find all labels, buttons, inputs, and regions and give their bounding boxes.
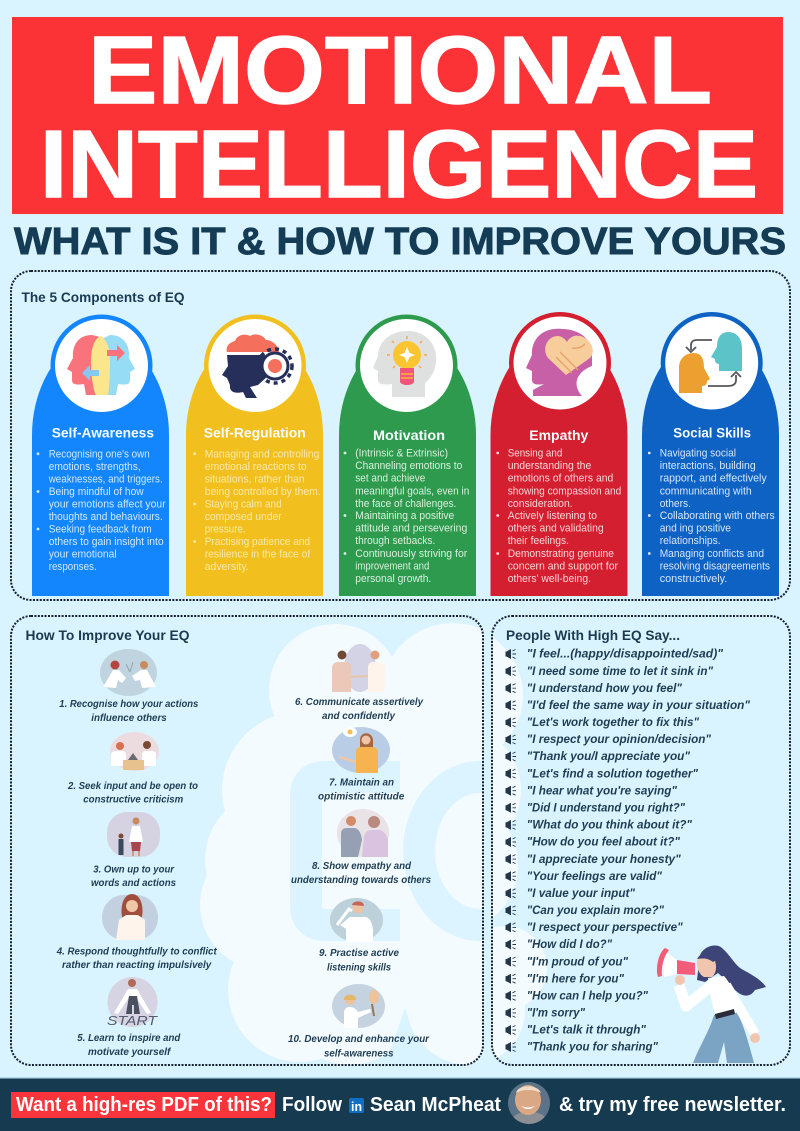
- text: empathy bullets: Actively listening to: [508, 510, 597, 522]
- text: self-regulation bullets: composed under: [205, 511, 282, 523]
- panel: the 5 components of EQ: [11, 271, 790, 600]
- icon: head with brain and gear: [222, 334, 292, 398]
- text: motivation bullets: improvement and: [355, 560, 429, 572]
- text: social skills bullets: rapport, and effectively: [660, 472, 767, 484]
- step 8: [291, 809, 431, 886]
- step 7: 7. Maintain an: [329, 778, 394, 788]
- step 1: [59, 649, 199, 724]
- step 1: 1. Recognise how your actions: [59, 699, 199, 710]
- list: quotes with megaphone bullets: "I'm sorry": [527, 1008, 586, 1020]
- text: self-awareness bullets: emotions, strengths,: [49, 461, 141, 473]
- text: self-awareness bullets: Being mindful of how: [49, 486, 144, 498]
- list: quotes with megaphone bullets: "I feel...(happy/disappointed/sad)": [527, 649, 724, 661]
- list: quotes with megaphone bullets: "I appreciate your honesty": [527, 854, 681, 866]
- list: quotes with megaphone bullets: "Thank you/I appreciate you": [527, 751, 691, 763]
- text: social skills bullets: [648, 448, 775, 585]
- text: motivation bullets: Maintaining a positive: [355, 510, 454, 522]
- list: quotes with megaphone bullets: "I need some time to let it sink in": [527, 666, 714, 678]
- illustration: woman holding a mask: [332, 984, 385, 1028]
- list: quotes with megaphone bullets: "I'm proud of you": [527, 956, 629, 968]
- text: self-awareness bullets: responses.: [49, 561, 97, 573]
- text: empathy bullets: their feelings.: [508, 535, 569, 547]
- text: empathy bullets: showing compassion and: [508, 486, 621, 498]
- text: social skills bullets: Collaborating with others: [660, 510, 775, 522]
- list: quotes with megaphone bullets: "Your feelings are valid": [527, 871, 663, 883]
- text: empathy bullets: others and validating: [508, 522, 604, 534]
- text: self-awareness bullets: Seeking feedback from: [49, 524, 152, 536]
- text: self-regulation bullets: being controlled by them.: [205, 486, 321, 498]
- text: self-awareness bullets: [37, 448, 166, 573]
- heading: people with high EQ say: People With High EQ Say...: [506, 628, 680, 643]
- text: empathy bullets: consideration.: [508, 498, 573, 510]
- footer bar: [0, 1077, 800, 1131]
- text: social skills bullets: Navigating social: [660, 448, 736, 460]
- card: self-regulation: [186, 314, 323, 596]
- background: cloud continuation: [492, 637, 547, 1058]
- card: self-awareness: [32, 314, 169, 596]
- list: quotes with megaphone bullets: "I hear what you're saying": [527, 785, 678, 797]
- list: quotes with megaphone bullets: "Thank you for sharing": [527, 1042, 659, 1054]
- illustration: woman comforting a friend: [337, 809, 389, 857]
- illustration: two people in conversation: [100, 649, 157, 696]
- step 5: 5. Learn to inspire and: [77, 1033, 181, 1044]
- icon: head with light bulb: [373, 331, 436, 397]
- step 10: self-awareness: [324, 1048, 394, 1060]
- list: quotes with megaphone bullets: "I'd feel the same way in your situation": [527, 700, 751, 712]
- text: motivation bullets: Channeling emotions to: [355, 460, 462, 472]
- list: quotes with megaphone bullets: "Let's talk it through": [527, 1025, 647, 1037]
- step 8: understanding towards others: [291, 875, 431, 886]
- heading: self-regulation: Self-Regulation: [204, 424, 306, 440]
- heading: motivation: Motivation: [373, 427, 445, 443]
- heading: empathy: Empathy: [529, 427, 589, 443]
- card: social skills: [642, 312, 779, 596]
- panel: how to improve your EQ: [10, 615, 484, 1066]
- title banner: INTELLIGENCE: [40, 111, 758, 218]
- step 9: [319, 898, 399, 974]
- photo: sean mcpheat portrait: [507, 1081, 551, 1125]
- text: self-awareness bullets: thoughts and behaviours.: [49, 511, 163, 523]
- list: quotes with megaphone bullets: "I'm here for you": [527, 973, 625, 985]
- text: self-awareness bullets: weaknesses, and triggers.: [48, 474, 163, 486]
- text: empathy bullets: concern and support for: [508, 560, 618, 572]
- text: self-regulation bullets: adversity.: [205, 561, 249, 573]
- step 4: [56, 894, 217, 971]
- text: self-awareness bullets: your emotions affect your: [49, 498, 166, 510]
- list: quotes with megaphone bullets: "I value your input": [527, 888, 636, 900]
- step 4: rather than reacting impulsively: [62, 960, 213, 971]
- panel: people with high EQ say: [491, 615, 791, 1066]
- text: self-regulation bullets: situations, rather than: [205, 474, 305, 486]
- icon: linkedin: in: [351, 1100, 362, 1114]
- illustration: woman thinking: [102, 894, 158, 940]
- title banner: EMOTIONAL: [88, 17, 712, 124]
- text: self-regulation bullets: Managing and controlling: [205, 448, 319, 460]
- step 3: 3. Own up to your: [93, 864, 175, 876]
- icon: head with handshake heart: [526, 329, 593, 396]
- text: empathy bullets: understanding the: [508, 460, 591, 472]
- text: social skills bullets: constructively.: [660, 573, 727, 585]
- text: empathy bullets: others' well-being.: [508, 573, 591, 585]
- illustration: two people with a feedback box: [110, 732, 159, 771]
- heading: self-awareness: Self-Awareness: [52, 424, 154, 440]
- step 3: words and actions: [91, 878, 176, 889]
- step 10: [288, 984, 430, 1060]
- step 4: 4. Respond thoughtfully to conflict: [56, 946, 217, 958]
- step 6: and confidently: [322, 711, 396, 722]
- text: motivation bullets: (Intrinsic & Extrinsic): [355, 448, 448, 460]
- icon: linkedin: [349, 1098, 364, 1114]
- text: empathy bullets: Demonstrating genuine: [508, 548, 614, 560]
- text: motivation bullets: personal growth.: [355, 573, 431, 585]
- step 5: motivate yourself: [88, 1047, 172, 1058]
- step 5: [77, 977, 181, 1058]
- text: empathy bullets: [496, 448, 621, 585]
- illustration: woman with megaphone: [657, 946, 766, 1063]
- text: motivation bullets: [344, 448, 469, 585]
- text: motivation bullets: the face of challenges.: [355, 498, 456, 510]
- list: quotes with megaphone bullets: "I respect your perspective": [527, 922, 683, 934]
- text: self-awareness bullets: Recognising one's own: [49, 448, 150, 460]
- icon: two overlapping heads: [67, 335, 135, 395]
- list: quotes with megaphone bullets: "I understand how you feel": [527, 683, 683, 695]
- subtitle: WHAT IS IT & HOW TO IMPROVE YOURS: [14, 221, 786, 263]
- step 2: [67, 732, 198, 806]
- step 9: listening skills: [327, 962, 391, 974]
- step 3: [91, 812, 176, 889]
- list: quotes with megaphone bullets: "I respect your opinion/decision": [527, 734, 712, 746]
- text: social skills bullets: and ing positive: [660, 522, 731, 534]
- step 7: optimistic attitude: [318, 792, 405, 802]
- text: social skills bullets: interactions, building: [660, 460, 756, 472]
- list: quotes with megaphone bullets: "How do you feel about it?": [527, 837, 681, 849]
- step 10: 10. Develop and enhance your: [288, 1034, 430, 1045]
- text: social skills bullets: relationships.: [660, 535, 721, 547]
- text: self-regulation bullets: emotional reactions to: [205, 461, 307, 473]
- card: empathy: [490, 312, 628, 596]
- text: sean mcpheat: Sean McPheat: [370, 1094, 501, 1116]
- text: empathy bullets: emotions of others and: [508, 472, 613, 484]
- text: social skills bullets: Managing conflicts and: [660, 548, 764, 560]
- list: quotes with megaphone bullets: "Let's find a solution together": [527, 768, 699, 780]
- illustration: optimistic woman with an idea: [332, 727, 390, 773]
- text: social skills bullets: others.: [660, 498, 691, 510]
- step 6: 6. Communicate assertively: [295, 697, 424, 708]
- heading: social skills: Social Skills: [673, 424, 751, 440]
- callout: want a high-res PDF: Want a high-res PDF of this?: [16, 1094, 272, 1116]
- text: motivation bullets: set and achieve: [355, 472, 425, 484]
- list: quotes with megaphone bullets: "Did I understand you right?": [527, 802, 686, 814]
- text: self-awareness bullets: your emotional: [49, 548, 117, 560]
- step 2: constructive criticism: [83, 794, 183, 806]
- text: motivation bullets: meaningful goals, even in: [355, 486, 469, 498]
- list: quotes with megaphone bullets: "Let's work together to fix this": [527, 717, 700, 729]
- text: self-awareness bullets: others to gain insight into: [49, 536, 164, 548]
- text: motivation bullets: through setbacks.: [355, 535, 435, 547]
- illustration: man listening: [330, 898, 383, 942]
- heading: how to improve your EQ: How To Improve Your EQ: [26, 628, 190, 643]
- text: self-regulation bullets: Practising patience and: [205, 536, 310, 548]
- text: self-regulation bullets: [193, 448, 321, 573]
- list: quotes with megaphone bullets: "Can you explain more?": [527, 905, 665, 917]
- heading: the 5 components: The 5 Components of EQ: [22, 290, 185, 305]
- icon: two heads exchanging arrows: [679, 332, 742, 393]
- text: social skills bullets: communicating with: [660, 486, 752, 498]
- text: follow: Follow: [282, 1094, 342, 1116]
- text: try my free newsletter: & try my free newsletter.: [559, 1094, 786, 1116]
- text: motivation bullets: Continuously striving for: [355, 548, 468, 560]
- text: self-regulation bullets: pressure.: [205, 524, 246, 536]
- title banner: [12, 17, 783, 218]
- list: quotes with megaphone bullets: "How did I do?": [527, 939, 613, 951]
- text: motivation bullets: attitude and persevering: [355, 522, 467, 534]
- illustration: runner at the start line: START: [107, 1013, 158, 1028]
- text: empathy bullets: Sensing and: [508, 448, 562, 460]
- illustration: adult and child: [107, 812, 160, 857]
- background: cloud with EQ letters: [200, 623, 483, 1065]
- text: self-regulation bullets: resilience in the face of: [205, 548, 311, 560]
- step 1: influence others: [91, 713, 167, 724]
- illustration: two people talking: [332, 644, 385, 692]
- list: quotes with megaphone bullets: [506, 649, 751, 1054]
- text: social skills bullets: resolving disagreements: [660, 560, 771, 572]
- step 7: [318, 727, 405, 802]
- card: motivation: [339, 314, 476, 596]
- list: quotes with megaphone bullets: "What do you think about it?": [527, 820, 693, 832]
- text: self-regulation bullets: Staying calm and: [205, 498, 282, 510]
- step 8: 8. Show empathy and: [312, 861, 412, 872]
- step 9: 9. Practise active: [319, 948, 399, 959]
- list: quotes with megaphone bullets: "How can I help you?": [527, 990, 649, 1002]
- step 2: 2. Seek input and be open to: [67, 781, 198, 792]
- step 6: [295, 644, 424, 722]
